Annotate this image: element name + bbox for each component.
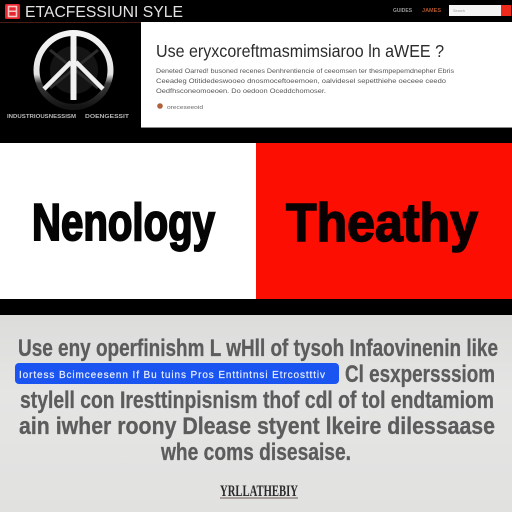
- peace panel captions: [7, 114, 130, 120]
- divider: [0, 22, 141, 23]
- card byline: oreceseeoid: [167, 105, 203, 111]
- word: Theathy: Theathy: [286, 193, 478, 253]
- panel: quote: [0, 315, 512, 512]
- peace panel captions: INDUSTRIOUSNESSISM: [7, 114, 76, 120]
- nav links: JAMES: [422, 8, 442, 14]
- highlight pill: [15, 363, 339, 384]
- highlight pill: Iortess Bcimceesenn If Bu tuins Pros Enttintnsi Etrcostttiv: [19, 370, 325, 381]
- search box: [449, 5, 511, 16]
- card body text: Deneted Oarred! busoned recenes Denhrentiencie of ceeomsen ter thesmpepemdnepher Ebris: [156, 68, 455, 75]
- credit: YRLLATHEBIY: [220, 483, 298, 500]
- card body text: Oedfhsconeomoeoen. Do oedoon Oceddchomoser.: [156, 88, 326, 95]
- panel: intro card: [141, 22, 512, 128]
- icon: red logo: [5, 4, 20, 19]
- peace panel captions: DOENGESSIT: [85, 114, 130, 120]
- header bar: [5, 4, 511, 21]
- nav links: GUIDES: [393, 8, 413, 14]
- card heading: Use eryxcoreftmasmimsiaroo ln aWEE ?: [156, 41, 444, 61]
- quote text: whe coms disesaise.: [160, 439, 351, 466]
- panel: white word: [0, 143, 256, 299]
- panel: red word: [256, 143, 512, 299]
- card body text: [156, 68, 455, 95]
- panel: peace symbol: [0, 23, 141, 127]
- quote text: [18, 335, 498, 466]
- search box: Search: [453, 9, 465, 13]
- word: Nenology: Nenology: [32, 194, 215, 252]
- site title: ETACFESSIUNI SYLE: [25, 4, 183, 21]
- icon: peace sign: [36, 33, 110, 107]
- card byline: [157, 103, 203, 111]
- nav links: [393, 8, 442, 14]
- credit: [220, 483, 298, 500]
- card body text: Ceeadeg Otitidedeswooeo dnosmoceftoeemoen, oalvidesel sepetthiehe oeceee ceedo: [156, 78, 446, 85]
